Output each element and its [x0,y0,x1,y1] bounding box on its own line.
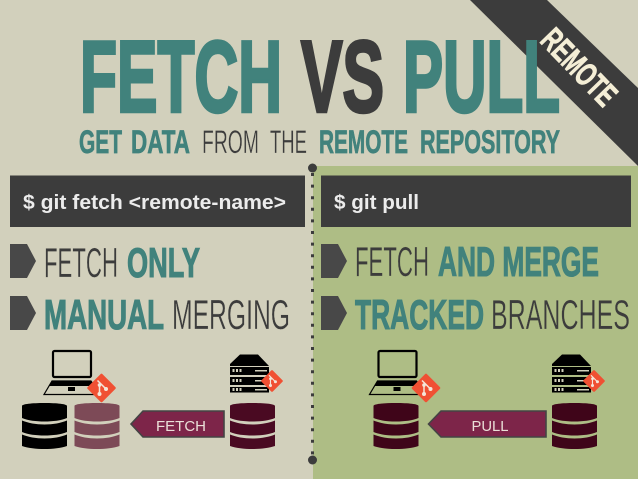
panel: pull background [313,166,638,479]
icon: remote database [552,403,597,449]
subtitle: REMOTE [319,124,408,160]
manual merging: MERGING [172,291,290,338]
subtitle: DATA [131,124,190,160]
arrow: fetch [131,411,224,437]
title: VS [301,22,384,134]
corner ribbon [470,0,638,166]
fetch only: ONLY [127,239,200,286]
icon: git badge on laptop [87,373,116,403]
right bullet list [321,238,630,338]
subtitle: FROM [202,124,259,160]
icon: laptop [370,351,426,394]
right command bar [321,176,631,227]
dotted divider [308,164,317,464]
fetch only: FETCH [44,239,118,286]
bullet marker [10,244,36,278]
subtitle [79,124,560,160]
icon: git badge on laptop [411,373,441,403]
icon: git badge on server [583,370,605,392]
bullet marker [321,296,347,330]
subtitle: REPOSITORY [420,124,560,160]
manual merging: MANUAL [44,291,164,338]
arrow: pull: PULL [472,418,508,435]
diagram: fetch [22,351,283,449]
icon: git badge on server [261,370,283,392]
arrow: pull [428,411,546,437]
tracked branches: TRACKED [355,291,484,338]
bullet marker [321,244,347,278]
icon: server [552,354,591,392]
left bullet list [10,239,290,338]
icon: remote database [230,403,275,449]
icon: local database [22,403,67,449]
subtitle: THE [270,124,307,160]
icon: fetched database [74,403,120,449]
bullet marker [10,296,36,330]
fetch and merge: FETCH [355,238,429,285]
diagram: pull [370,351,605,449]
left command bar: $ git fetch <remote-name> [23,192,286,214]
title: FETCH [80,22,282,134]
subtitle: GET [79,124,122,160]
icon: laptop [44,351,100,394]
icon: server [230,354,269,392]
left command bar [10,176,305,227]
arrow: fetch: FETCH [156,418,206,435]
right command bar: $ git pull [334,192,419,214]
icon: local database [374,403,418,449]
